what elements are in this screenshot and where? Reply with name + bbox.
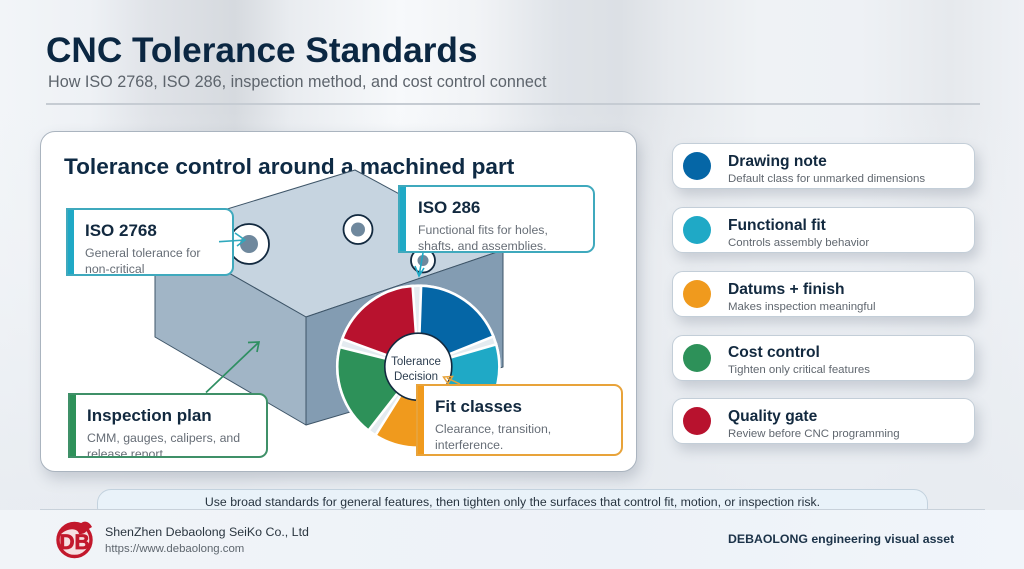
callout: Inspection plan: Inspection plan [87, 406, 212, 425]
company name: ShenZhen Debaolong SeiKo Co., Ltd [105, 525, 309, 539]
callout: Fit classes: Fit classes [435, 397, 522, 416]
icon: hole 3 [411, 248, 435, 272]
legend: Drawing note: Default class for unmarked dimensions [728, 172, 925, 184]
wheel segment: orange [375, 367, 464, 448]
callout: Fit classes: Clearance, transition, [435, 422, 551, 436]
company url: https://www.debaolong.com [105, 543, 244, 555]
wheel centre label: Decision [394, 371, 438, 383]
wheel centre label [385, 333, 452, 400]
arrow: Inspection plan to block [206, 342, 259, 392]
legend: Functional fit: Functional fit [728, 216, 826, 234]
callout: Inspection plan: CMM, gauges, calipers, and [87, 431, 240, 445]
callout: Fit classes [416, 384, 623, 456]
panel heading: Tolerance control around a machined part [64, 154, 514, 179]
footer [0, 510, 1024, 569]
title: CNC Tolerance Standards [46, 31, 477, 70]
logo: DB [59, 531, 90, 554]
logo [56, 522, 93, 558]
callout: ISO 286 [398, 185, 595, 253]
legend: Drawing note [672, 143, 975, 189]
callout: ISO 286: shafts, and assemblies. [418, 239, 546, 253]
legend: Quality gate: Review before CNC programming [728, 428, 900, 440]
legend: Datums + finish [672, 271, 975, 317]
callout: Fit classes: interference. [435, 438, 503, 452]
wheel segment: blue [418, 286, 493, 367]
panel: tolerance control around a machined part [40, 131, 637, 472]
machined block [155, 170, 503, 425]
legend: Functional fit [672, 207, 975, 253]
wheel segment: red [342, 286, 418, 367]
legend: Quality gate: Quality gate [728, 408, 817, 425]
callout: ISO 2768: non-critical [85, 262, 144, 276]
legend: Cost control: Tighten only critical features [728, 364, 870, 376]
legend: Cost control [672, 334, 975, 380]
takeaway banner [97, 489, 928, 521]
subtitle: How ISO 2768, ISO 286, inspection method, and cost control connect [48, 73, 547, 91]
callout: ISO 2768: ISO 2768 [85, 221, 157, 240]
legend: Datums + finish: Datums + finish [728, 280, 845, 298]
callout: ISO 2768 [66, 208, 234, 276]
decision wheel [337, 286, 499, 448]
wheel centre label: Tolerance [391, 356, 441, 368]
callout: ISO 286: Functional fits for holes, [418, 223, 548, 237]
wheel segment: teal [418, 344, 499, 429]
arrow: ISO 2768 to hole [219, 233, 245, 246]
callout: ISO 286: ISO 286 [418, 198, 480, 216]
icon: hole 2 [344, 215, 372, 244]
icon: hole 1 [229, 224, 269, 264]
legend: Quality gate [672, 398, 975, 444]
takeaway banner: Use broad standards for general features, then tighten only the surfaces that control fit, motion, or inspection risk. [205, 495, 820, 509]
callout: ISO 2768: General tolerance for [85, 246, 201, 260]
footer tag: DEBAOLONG engineering visual asset [728, 532, 954, 546]
wheel segment: green [337, 347, 418, 430]
legend: Cost control: Cost control [728, 344, 820, 361]
arrow: ISO 286 to hole [415, 253, 424, 276]
legend: Drawing note: Drawing note [728, 152, 827, 170]
callout: Inspection plan [68, 393, 268, 458]
legend: Datums + finish: Makes inspection meaningful [728, 300, 876, 312]
arrow: Fit classes to wheel [444, 376, 460, 384]
legend: Functional fit: Controls assembly behavior [728, 236, 869, 248]
